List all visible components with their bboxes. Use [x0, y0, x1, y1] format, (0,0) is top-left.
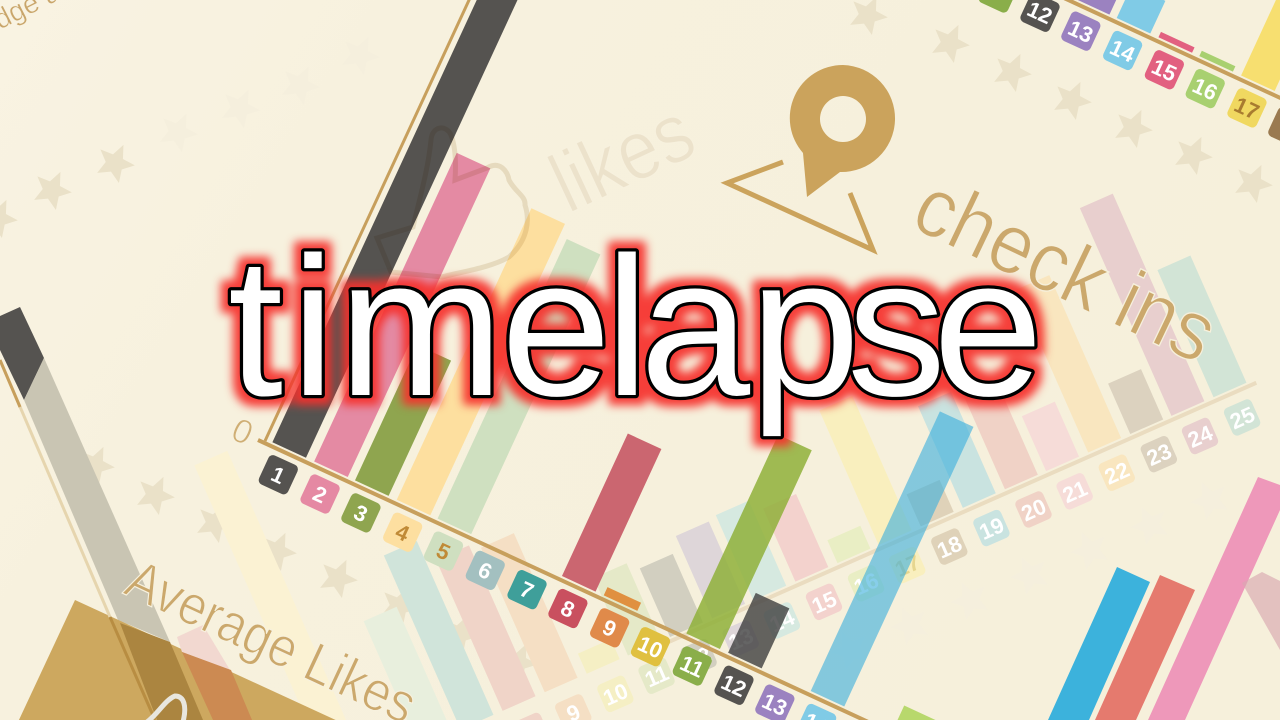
main number badges: 10 [634, 631, 667, 664]
pin ground outline [727, 162, 873, 250]
grey bar body [24, 358, 170, 642]
pale pink bar [177, 625, 230, 670]
dark tan bar overlap [120, 623, 203, 720]
pink bar [1148, 477, 1280, 720]
faded number badges: 19 [975, 512, 1008, 545]
icon: faded thumbs up [377, 128, 527, 277]
main number badges: 2 [309, 481, 331, 508]
lower-left chart fragment [0, 307, 340, 720]
main number badges: 11 [676, 650, 708, 683]
faded number badges [511, 398, 1262, 720]
orange bar overlap [182, 652, 252, 720]
faded bars [194, 63, 1246, 720]
main number badges: 7 [516, 576, 538, 604]
label: likes (faded): likes [536, 83, 708, 230]
faded number badges: 22 [1101, 457, 1133, 490]
icon: white thumb [147, 696, 185, 720]
tan panel [18, 600, 340, 720]
faded number badges: 21 [1059, 475, 1091, 508]
faded number badges: 11 [641, 660, 672, 692]
axis label zero: 0 [226, 411, 259, 453]
fragment badges: 14 [1106, 34, 1139, 68]
faded number badges: 24 [1184, 420, 1217, 453]
faded number badges: 16 [850, 567, 883, 600]
faded number badges: 20 [1017, 494, 1050, 526]
main number badges: 12 [717, 669, 750, 702]
vertical axis line [265, 0, 470, 441]
main number badges: 5 [433, 538, 454, 565]
fragment badges: 15 [1148, 54, 1181, 87]
mauve bar [1242, 572, 1280, 650]
fragment badges: 17 [1230, 92, 1263, 125]
fragment badges: 16 [1189, 73, 1221, 106]
top-right chart fragment [977, 0, 1280, 148]
faded background bar chart [194, 60, 1273, 720]
fragment baseline [1018, 0, 1280, 103]
axis line strong top [0, 360, 20, 407]
blue bar [1048, 567, 1150, 720]
faded number badges: 12 [683, 641, 715, 674]
faded number badges: 23 [1143, 438, 1175, 471]
red bar [1095, 575, 1195, 720]
main bars [272, 0, 1219, 720]
main bar chart [242, 0, 1219, 720]
main title: timelapse: timelapse [228, 216, 1043, 437]
icon: map pin check-in [727, 65, 895, 250]
faded number badges: 17 [891, 549, 924, 582]
faded number badges: 13 [725, 623, 757, 655]
main number badges: 8 [557, 595, 578, 623]
main number badges: 3 [350, 499, 372, 527]
faded number badges: 10 [599, 678, 632, 711]
faded number badges: 14 [766, 604, 799, 637]
fragment badges: 13 [1064, 15, 1097, 48]
main axis baseline [258, 440, 893, 720]
faded axis line [660, 383, 1256, 646]
main number badges: 6 [474, 557, 496, 585]
label: check ins: check ins [900, 157, 1231, 382]
main number badges: 9 [599, 614, 620, 642]
main number badges [257, 453, 838, 720]
fragment badges [977, 0, 1280, 148]
axis line [0, 360, 110, 617]
right colored bars [1048, 477, 1280, 720]
faded number badges: 25 [1226, 402, 1259, 434]
pin shape [790, 65, 895, 197]
faded number badges: 15 [808, 586, 840, 619]
main number badges: 1 [267, 461, 289, 489]
faded number badges: 18 [933, 531, 966, 563]
axis line strong bottom [110, 617, 155, 720]
fragment bars [1076, 0, 1280, 91]
dark bar top [0, 307, 44, 400]
main number badges: 4 [392, 519, 414, 547]
